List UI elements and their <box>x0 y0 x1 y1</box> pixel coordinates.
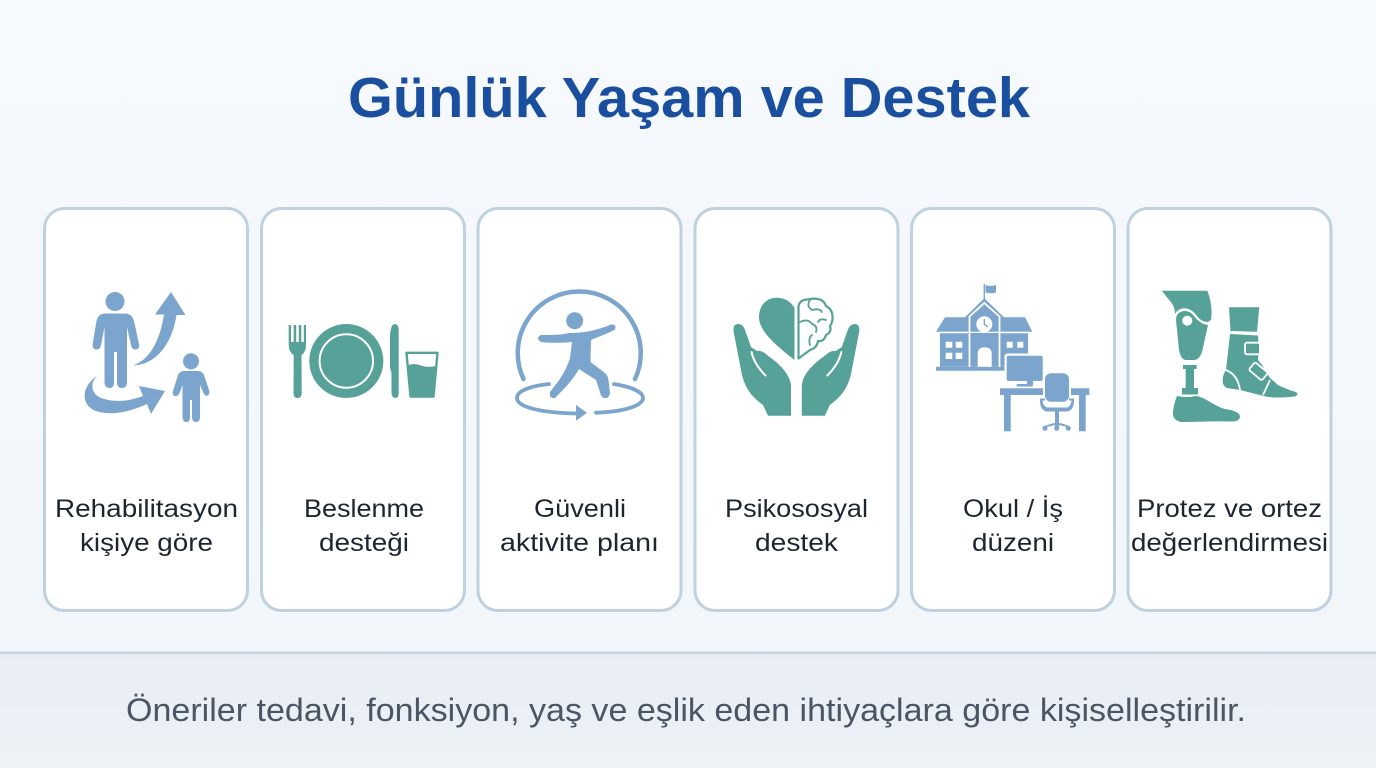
label: Psikososyal <box>725 495 868 523</box>
panel: okul / iş <box>912 208 1114 610</box>
panel: beslenme: desteği <box>319 529 409 557</box>
label: Güvenli <box>534 495 626 523</box>
title: Günlük Yaşam ve Destek <box>348 66 1030 130</box>
panel: aktivite: aktivite planı <box>500 529 659 557</box>
panel: protez ve ortez <box>1128 208 1331 610</box>
label: Rehabilitasyon <box>55 495 238 523</box>
panel: rehabilitasyon <box>44 208 248 610</box>
panel: psikososyal: destek <box>755 529 839 557</box>
footer band <box>0 652 1376 768</box>
panel: rehabilitasyon: kişiye göre <box>80 529 213 557</box>
label: Protez ve ortez <box>1137 495 1322 523</box>
label: Beslenme <box>304 495 424 523</box>
panel: psikososyal <box>695 208 898 610</box>
panel: beslenme <box>262 208 464 610</box>
icon: hands holding heart and brain <box>733 298 859 416</box>
icon: fork, plate, knife and glass <box>289 324 438 398</box>
panel: okul / iş: düzeni <box>972 529 1054 557</box>
panel: protez ve ortez: değerlendirmesi <box>1131 529 1328 557</box>
icon: prosthetic leg and ankle brace <box>1162 291 1298 422</box>
icon: school and desk <box>936 284 1089 431</box>
icon: adult, child and arrows <box>85 292 209 422</box>
footer note: Öneriler tedavi, fonksiyon, yaş ve eşlik eden ihtiyaçlara göre kişiselleştirilir. <box>126 692 1246 728</box>
label: Okul / İş <box>963 494 1063 523</box>
panel: aktivite <box>478 208 681 610</box>
icon: balancing figure in circle <box>517 292 643 421</box>
